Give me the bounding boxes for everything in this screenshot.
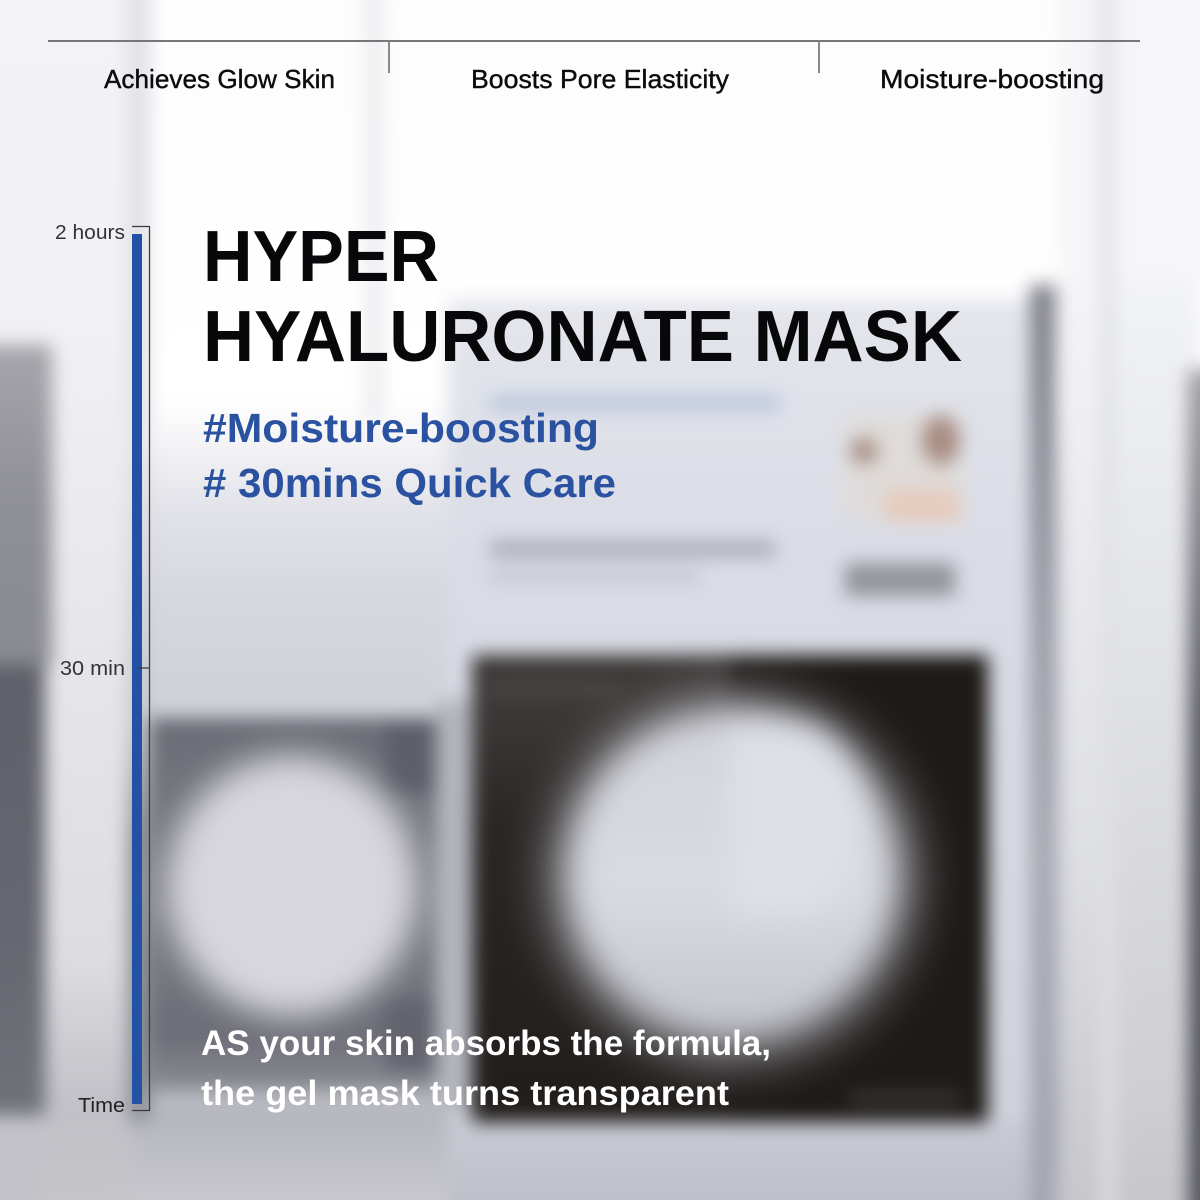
small product box	[150, 718, 438, 1090]
title: HYALURONATE MASK	[203, 297, 962, 377]
caption: AS your skin absorbs the formula,	[201, 1024, 771, 1063]
benefit: boosts pore elasticity: Boosts Pore Elasticity	[471, 64, 729, 94]
caption	[201, 1024, 771, 1113]
label: time: Time	[78, 1095, 125, 1117]
hashtags: # 30mins Quick Care	[203, 460, 616, 506]
benefit: moisture-boosting: Moisture-boosting	[880, 64, 1104, 94]
caption: the gel mask turns transparent	[201, 1074, 729, 1113]
timeline scale	[55, 222, 150, 1117]
hashtags	[203, 405, 616, 506]
timeline bar	[132, 234, 142, 1104]
benefit: achieves glow skin: Achieves Glow Skin	[104, 64, 335, 94]
label: 2 hours: 2 hours	[55, 222, 125, 244]
timeline bracket	[132, 226, 150, 1110]
large product card	[448, 300, 1033, 1120]
title	[203, 217, 962, 377]
top benefit bar	[48, 40, 1140, 94]
hashtags: #Moisture-boosting	[203, 405, 599, 451]
title: HYPER	[203, 217, 439, 297]
label: 30 min: 30 min	[60, 658, 125, 680]
